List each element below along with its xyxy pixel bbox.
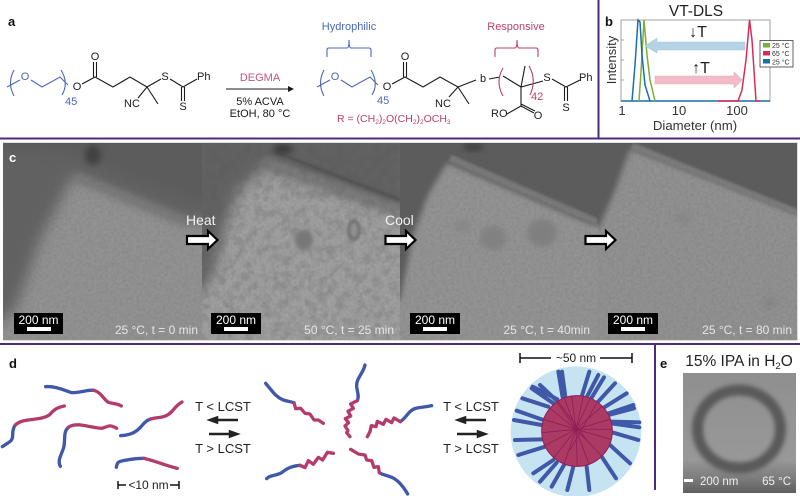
block copolymer structure: NC xyxy=(435,98,451,110)
responsive block bracket xyxy=(487,21,545,57)
macro-CTA structure: Ph xyxy=(197,71,210,83)
x axis label: Diameter (nm) xyxy=(653,118,737,133)
time and temperature captions: 25 °C, t = 80 min xyxy=(702,323,792,337)
panel c: liquid cell TEM time series xyxy=(0,130,800,341)
block copolymer structure xyxy=(317,51,592,122)
plot frame xyxy=(621,20,770,101)
reaction arrow and conditions xyxy=(226,72,294,120)
reaction arrow and conditions: DEGMA xyxy=(240,72,281,84)
cooling arrow: ↓T xyxy=(689,24,707,41)
micelle with blue corona and red core xyxy=(511,366,641,496)
hydrophilic block bracket xyxy=(322,21,377,57)
macro-CTA structure: NC xyxy=(124,98,140,110)
R group definition: OCH xyxy=(424,113,447,125)
DLS traces xyxy=(621,20,770,101)
equilibrium arrows 2 xyxy=(443,399,499,456)
TEM image 2 xyxy=(202,143,400,340)
panel b: VT-DLS chart xyxy=(604,3,793,133)
block copolymer structure: O xyxy=(534,110,543,122)
x axis tick labels: 100 xyxy=(726,103,748,118)
panel title: 2 xyxy=(775,361,781,372)
legend: 25 °C xyxy=(772,58,790,66)
macro-CTA structure: O xyxy=(73,81,82,93)
equilibrium arrows 2: T < LCST xyxy=(443,399,499,414)
macro-CTA structure: O xyxy=(21,71,30,83)
hydrophilic block bracket: Hydrophilic xyxy=(322,21,377,33)
TEM image 3 xyxy=(400,143,598,340)
macro-CTA structure: S xyxy=(161,71,169,83)
macro-CTA structure: 45 xyxy=(65,96,77,108)
R group definition: 2 xyxy=(382,119,386,126)
responsive block bracket: Responsive xyxy=(487,21,545,33)
equilibrium arrows 2: T > LCST xyxy=(443,441,499,456)
panel label a: a xyxy=(8,14,16,29)
size scale about 50 nm: ~50 nm xyxy=(556,351,596,365)
equilibrium arrows 1 xyxy=(195,399,251,456)
panel label d: d xyxy=(9,356,17,371)
legend: 65 °C xyxy=(772,50,790,58)
time and temperature captions xyxy=(115,323,792,337)
block copolymer structure: O xyxy=(383,81,392,93)
scale bar: 200 nm xyxy=(700,476,738,488)
equilibrium arrows 1: T > LCST xyxy=(195,441,251,456)
panel a: RAFT block copolymer synthesis xyxy=(7,14,592,126)
TEM image 1 xyxy=(3,143,202,340)
size scale about 50 nm xyxy=(520,351,632,365)
macro-CTA structure: O xyxy=(91,51,100,63)
y axis label: Intensity xyxy=(604,35,619,84)
x axis tick labels xyxy=(618,103,748,118)
R group definition: 2 xyxy=(413,119,417,126)
panel e: TEM of vesicle in IPA and water xyxy=(660,353,796,493)
R group definition: O(CH xyxy=(386,113,413,125)
scale bar 1 xyxy=(14,313,63,334)
time and temperature captions: 25 °C, t = 40min xyxy=(503,323,590,337)
size scale under 10 nm xyxy=(118,478,179,492)
block copolymer structure: O xyxy=(331,71,340,83)
free unimer chains xyxy=(2,387,182,468)
third transition arrow xyxy=(586,231,616,249)
time and temperature captions: 25 °C, t = 0 min xyxy=(115,323,198,337)
R group definition: 3 xyxy=(447,119,451,126)
panel label e: e xyxy=(660,356,667,371)
block copolymer structure: S xyxy=(562,102,570,114)
legend xyxy=(760,40,793,67)
reaction arrow and conditions: EtOH, 80 °C xyxy=(230,108,290,120)
panel d: self-assembly schematic xyxy=(2,351,641,496)
x axis tick labels: 10 xyxy=(672,103,686,118)
equilibrium arrows 1: T < LCST xyxy=(195,399,251,414)
panel label c: c xyxy=(9,150,16,165)
heating arrow: ↑T xyxy=(692,60,710,77)
block copolymer structure: 42 xyxy=(531,91,543,103)
R group definition: R = (CH xyxy=(337,113,375,125)
collapsed-to-extended wavy chains xyxy=(266,365,432,494)
scale bar 3 xyxy=(410,313,460,334)
panel title: O xyxy=(781,353,793,370)
x axis tick labels: 1 xyxy=(618,103,626,118)
scale bar 1: 200 nm xyxy=(18,313,59,327)
scale bar 2: 200 nm xyxy=(216,313,256,327)
block copolymer structure: RO xyxy=(491,108,508,120)
cooling arrow xyxy=(645,24,745,53)
heating arrow xyxy=(655,60,742,88)
block copolymer structure: S xyxy=(543,72,551,84)
macro-CTA structure xyxy=(7,51,210,113)
block copolymer structure: O xyxy=(401,51,410,63)
size scale under 10 nm: <10 nm xyxy=(128,478,169,492)
scale bar 3: 200 nm xyxy=(415,313,455,327)
legend: 25 °C xyxy=(772,42,790,50)
scale bar 4 xyxy=(608,313,658,334)
R group definition: ) xyxy=(379,113,382,125)
R group definition: 2 xyxy=(375,119,379,126)
block copolymer structure: 45 xyxy=(377,95,389,107)
heat arrow: Heat xyxy=(186,212,216,228)
scale bar 2 xyxy=(211,313,261,334)
block copolymer structure: b xyxy=(480,73,486,85)
macro-CTA structure: S xyxy=(179,101,187,113)
TEM image 4 xyxy=(598,143,797,340)
reaction arrow and conditions: 5% ACVA xyxy=(236,96,284,108)
block copolymer structure: Ph xyxy=(579,72,592,84)
TEM image of ring-shaped vesicle xyxy=(683,373,796,493)
R group definition: ) xyxy=(416,113,420,125)
scale bar 4: 200 nm xyxy=(613,313,653,327)
panel label b: b xyxy=(605,14,613,29)
time and temperature captions: 50 °C, t = 25 min xyxy=(304,323,394,337)
temperature caption: 65 °C xyxy=(762,476,791,488)
panel title: 15% IPA in H xyxy=(685,353,775,370)
chart title: VT-DLS xyxy=(669,3,723,20)
R group definition: 2 xyxy=(420,119,424,126)
cool arrow xyxy=(385,212,416,249)
TEM frame backing xyxy=(3,142,798,341)
heat arrow xyxy=(186,212,218,249)
cool arrow: Cool xyxy=(385,212,414,228)
